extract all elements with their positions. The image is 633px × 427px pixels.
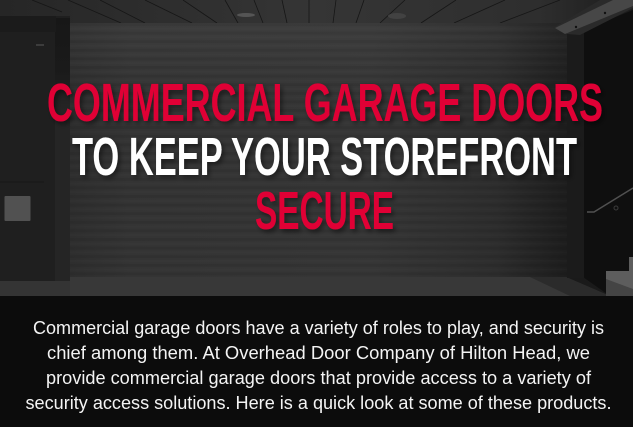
intro paragraph: provide commercial garage doors that provide access to a variety of bbox=[46, 368, 592, 388]
intro panel bbox=[0, 296, 633, 427]
intro paragraph: chief among them. At Overhead Door Company of Hilton Head, we bbox=[47, 343, 590, 363]
floor bbox=[0, 277, 610, 296]
stairs bbox=[606, 257, 633, 296]
headline bbox=[47, 74, 603, 241]
rolling door bbox=[70, 23, 572, 277]
intro paragraph: security access solutions. Here is a quick look at some of these products. bbox=[26, 393, 612, 413]
headline line 3: SECURE bbox=[255, 182, 394, 241]
intro paragraph: Commercial garage doors have a variety of roles to play, and security is bbox=[33, 318, 604, 338]
intro paragraph bbox=[26, 318, 612, 413]
right wall bbox=[553, 0, 633, 296]
ceiling with panel lines bbox=[0, 0, 633, 24]
left wall with panel bbox=[0, 16, 70, 281]
photo background: garage door scene bbox=[0, 0, 633, 296]
stair handrail bbox=[587, 188, 633, 212]
